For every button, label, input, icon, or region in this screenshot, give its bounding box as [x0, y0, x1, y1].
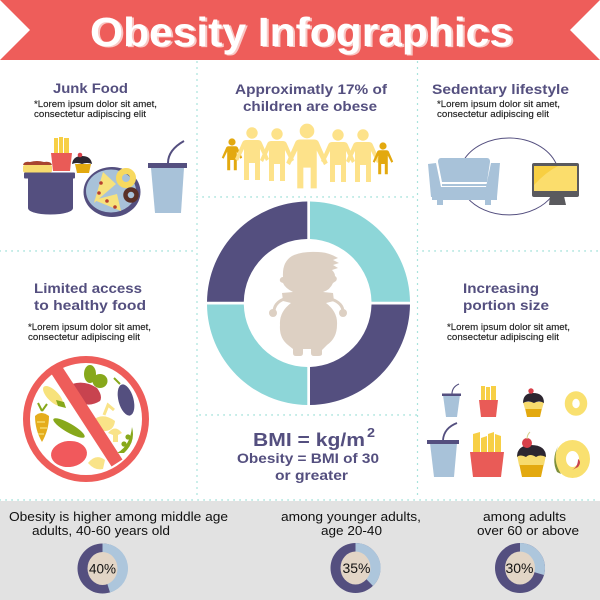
text: limited access note: *Lorem ipsum dolor sit amet, — [28, 322, 151, 333]
text: younger adults caption: among younger adults, — [281, 510, 421, 524]
text: obesity definition: or greater — [275, 467, 349, 483]
icon: obese child — [269, 252, 347, 356]
text: older adults caption: over 60 or above — [477, 524, 579, 538]
heading: portion size: Increasing — [463, 280, 539, 296]
panel: junk food — [23, 80, 187, 217]
text: younger adults caption: age 20-40 — [321, 524, 382, 538]
icon: soda cup — [148, 141, 187, 213]
icon: vegetables with prohibition sign — [26, 360, 146, 478]
icon: orbit line — [463, 138, 556, 215]
text: portion size note: *Lorem ipsum dolor sit amet, — [447, 322, 570, 333]
panel: older adults — [477, 510, 579, 593]
title banner: Obesity Infographics — [92, 10, 515, 56]
icons: large portions — [427, 423, 584, 477]
chart: 40 percent donut: 40% — [89, 562, 116, 576]
chart: 40 percent donut — [78, 543, 128, 594]
panel: limited access to healthy food — [26, 280, 151, 478]
panel: BMI formula — [237, 425, 379, 483]
panel: younger adults — [281, 510, 421, 593]
icon: sofa — [428, 158, 500, 205]
icon: pizza plate — [84, 167, 140, 217]
text: BMI equation: BMI = kg/m — [253, 430, 365, 450]
panel: increasing portion size — [427, 280, 584, 477]
text: junk food note: consectetur adipiscing elit — [34, 109, 146, 120]
text: junk food note: *Lorem ipsum dolor sit amet, — [34, 99, 157, 110]
panel: middle age adults — [9, 510, 228, 594]
heading: limited access: to healthy food — [34, 297, 146, 313]
heading: junk food: Junk Food — [53, 80, 128, 96]
panel: sedentary lifestyle — [428, 81, 579, 215]
text: limited access note: consectetur adipiscing elit — [28, 332, 140, 343]
title banner — [0, 0, 600, 60]
heading: children statistic: Approximatly 17% of — [235, 81, 387, 97]
text: middle age caption: Obesity is higher among middle age — [9, 510, 228, 524]
text: obesity definition: Obesity = BMI of 30 — [237, 450, 379, 466]
icons: small portions — [442, 384, 584, 417]
icon: monitor — [532, 163, 579, 205]
heading: children statistic: children are obese — [243, 98, 377, 114]
panel: children statistic — [222, 81, 393, 188]
heading: portion size: portion size — [463, 297, 549, 313]
text: middle age caption: adults, 40-60 years old — [32, 524, 170, 538]
title banner: Obesity Infographics — [90, 9, 513, 55]
chart: 35 percent donut: 35% — [342, 561, 370, 576]
chart: 30 percent donut: 30% — [506, 561, 534, 576]
text: sedentary note: consectetur adipiscing elit — [437, 109, 549, 120]
text: portion size note: consectetur adipiscing elit — [447, 332, 559, 343]
icon: junk food table — [23, 137, 92, 214]
text: sedentary note: *Lorem ipsum dolor sit amet, — [437, 99, 560, 110]
text: older adults caption: among adults — [483, 510, 566, 524]
heading: limited access: Limited access — [34, 280, 142, 296]
heading: sedentary lifestyle: Sedentary lifestyle — [432, 81, 569, 97]
text: BMI exponent: 2 — [367, 425, 375, 440]
icon: family of people — [222, 124, 393, 188]
chart: central donut — [207, 202, 410, 405]
